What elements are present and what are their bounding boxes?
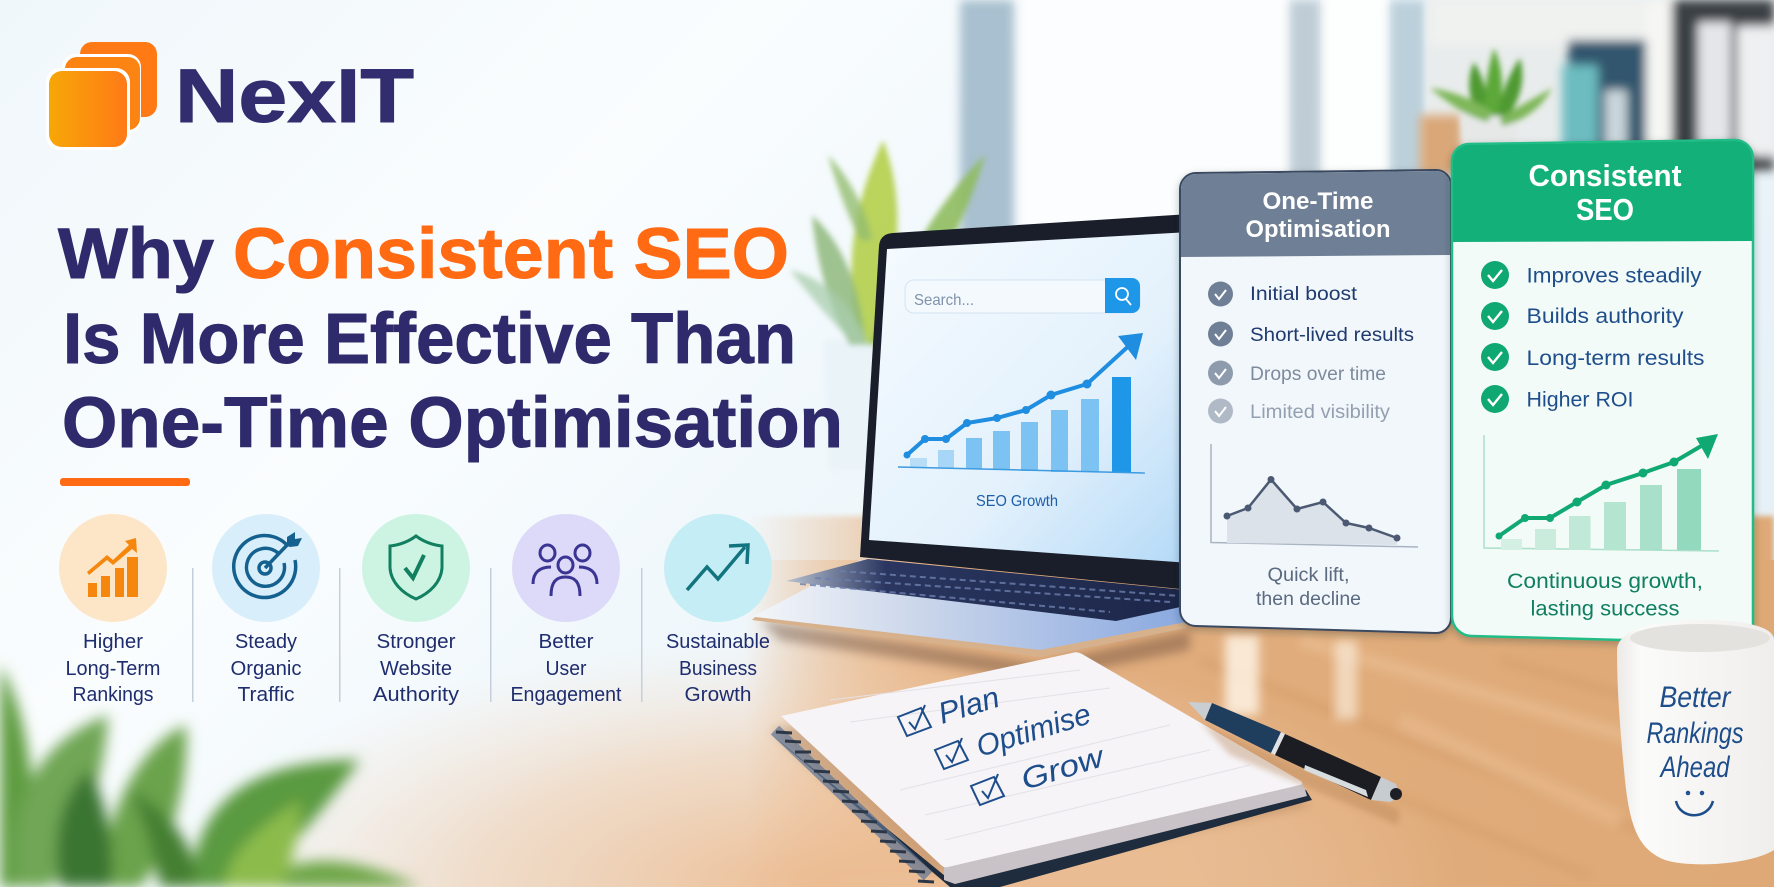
label: Authority (373, 684, 459, 706)
screen (869, 232, 1190, 563)
title (58, 215, 843, 463)
label: Growth (684, 684, 752, 706)
bookshelf (1420, 0, 1774, 175)
laptop base (752, 560, 1186, 657)
notebook cover (772, 735, 1312, 887)
label (666, 631, 770, 706)
benefit: steady organic traffic (212, 514, 320, 706)
card body (1452, 140, 1753, 643)
icon: target (212, 514, 320, 622)
mug text: Rankings (1646, 717, 1744, 750)
wood desk (0, 516, 1774, 887)
panel: consistent seo (1452, 140, 1753, 643)
decline chart (1211, 444, 1418, 547)
label (510, 631, 622, 706)
label: Website (380, 658, 452, 680)
label: Stronger (376, 631, 456, 653)
mug text (1646, 681, 1744, 784)
pen (1188, 702, 1402, 825)
caption: then decline (1256, 589, 1361, 610)
card title (1246, 188, 1390, 243)
icon: trend arrow (664, 514, 772, 622)
foreground blurred plant (0, 665, 420, 887)
caption (1256, 565, 1361, 610)
label (66, 631, 160, 706)
checklist: Limited visibility (1250, 402, 1391, 423)
logo (46, 42, 414, 150)
caption: Continuous growth, (1507, 570, 1703, 593)
label: Rankings (72, 684, 154, 706)
handwritten checklist (898, 681, 1110, 805)
page (781, 652, 1302, 867)
spiral binding (775, 730, 934, 882)
checklist: Builds authority (1526, 305, 1684, 328)
title: Consistent SEO (233, 215, 789, 294)
logo wordmark: NexIT (175, 54, 414, 139)
page edge (944, 783, 1307, 884)
caption: lasting success (1530, 598, 1680, 620)
label: Sustainable (666, 631, 770, 653)
label: Business (679, 658, 757, 680)
growth chart (1484, 434, 1719, 551)
laptop (752, 214, 1190, 680)
icon: shield (362, 514, 470, 622)
notebook (770, 652, 1312, 887)
benefit: better user engagement (510, 514, 622, 706)
screen bezel (860, 214, 1190, 590)
checklist (1481, 261, 1704, 413)
label: Engagement (510, 684, 622, 706)
mug text: Better (1660, 681, 1731, 714)
card title: One-Time (1262, 188, 1374, 215)
growth chart (898, 333, 1145, 510)
label: Traffic (238, 684, 294, 706)
window panes (960, 0, 1774, 500)
benefit: stronger website authority (362, 514, 470, 706)
search bar (905, 278, 1140, 313)
caption (1507, 570, 1703, 620)
icon: people (512, 514, 620, 622)
label: Long-Term (66, 658, 160, 680)
icon: rising bars (59, 514, 167, 622)
checklist: Long-term results (1526, 347, 1704, 370)
checklist: Drops over time (1250, 364, 1386, 385)
panel: one-time optimisation (1180, 170, 1451, 633)
label: User (546, 658, 587, 680)
label: Steady (235, 631, 297, 653)
handwritten checklist: Grow (1017, 740, 1110, 797)
label (373, 631, 459, 706)
label: Organic (230, 658, 302, 680)
benefit: higher long-term rankings (59, 514, 167, 706)
desk plant (790, 140, 985, 470)
title: Is More Effective Than (63, 300, 796, 379)
card title: Optimisation (1246, 216, 1390, 243)
checklist (1208, 282, 1414, 424)
checklist: Short-lived results (1250, 325, 1414, 346)
handwritten checklist: Optimise (972, 698, 1095, 764)
caption: Quick lift, (1268, 565, 1350, 586)
card title: SEO (1576, 192, 1634, 227)
laptop shadow (760, 620, 1190, 680)
coffee mug (1617, 620, 1774, 864)
benefit: sustainable business growth (664, 514, 772, 706)
card header (1453, 141, 1752, 242)
card title: Consistent (1528, 158, 1682, 193)
card header (1181, 171, 1450, 257)
shelf plant (1430, 48, 1552, 165)
card title (1528, 158, 1682, 227)
title underline (60, 478, 190, 486)
title: One-Time Optimisation (62, 384, 843, 463)
card body (1180, 170, 1451, 633)
keyboard (786, 559, 1185, 621)
smiley (1676, 792, 1713, 815)
checklist: Higher ROI (1526, 388, 1634, 412)
logo mark (46, 42, 157, 150)
handwritten checklist: Plan (934, 681, 1003, 731)
title: Why (58, 215, 215, 294)
mug text: Ahead (1659, 751, 1731, 784)
growth chart: SEO Growth (976, 493, 1058, 510)
checklist: Improves steadily (1526, 264, 1702, 288)
label (230, 631, 302, 706)
checklist: Initial boost (1250, 284, 1358, 305)
label: Higher (83, 631, 143, 653)
search bar: Search... (914, 292, 974, 309)
notebook shadow (770, 680, 1312, 872)
label: Better (538, 631, 594, 653)
